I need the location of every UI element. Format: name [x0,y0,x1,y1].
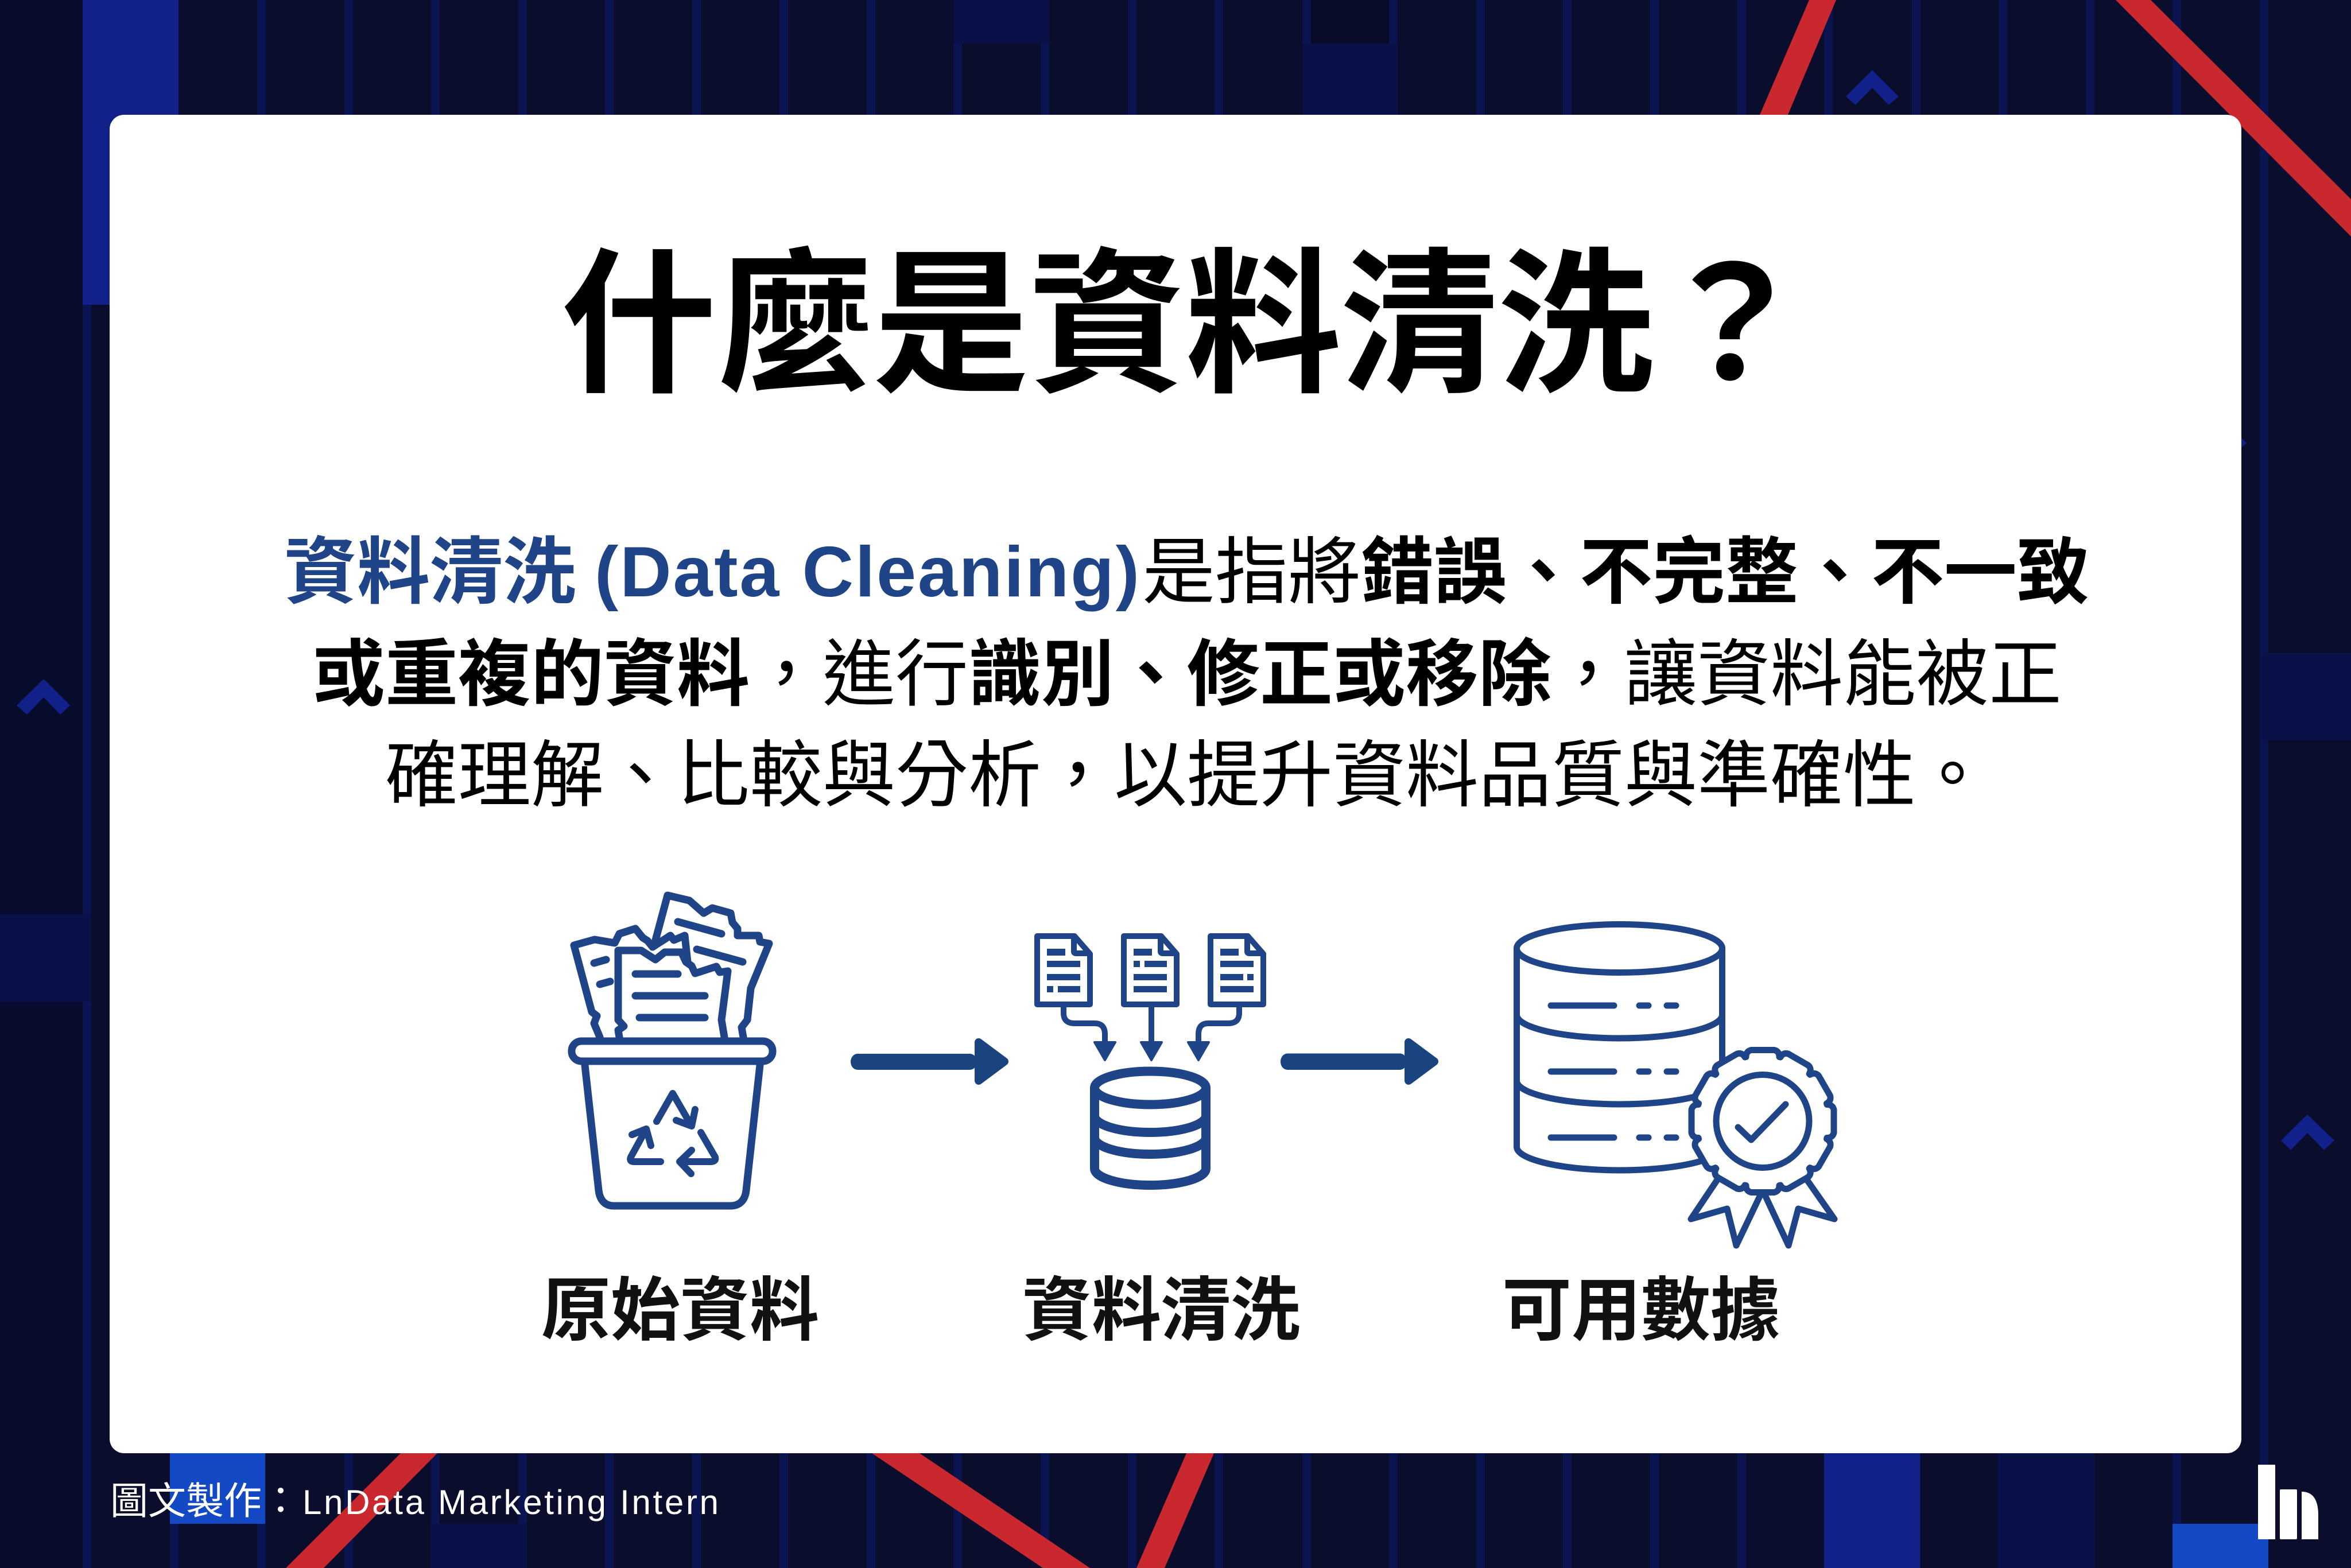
definition line 3: 確理解、比較與分析，以提升資料品質與準確性。 [385,716,1989,822]
document 3 [1211,936,1263,1004]
title: 什麼是資料清洗？ [561,199,1810,425]
label: usable data: 可用數據 [1502,1254,1780,1354]
bin lid [572,1041,773,1061]
definition line 1 [284,513,2090,619]
left paper [574,929,653,1037]
definition line 1: 是指將錯誤、不完整、不一致 [1142,513,2090,619]
bin body [585,1065,760,1206]
footer credit [110,1470,719,1526]
back paper [653,895,769,1037]
icon: three documents flowing into database [1037,936,1263,1185]
footer credit: LnData Marketing Intern [302,1483,719,1522]
arrow: cleaning to usable data [1281,1042,1434,1081]
icon: recycling bin with raw documents [572,895,773,1206]
badge ribbons [1691,1181,1834,1245]
definition line 1: 資料清洗 [284,513,576,619]
front paper [618,950,728,1037]
label: raw data: 原始資料 [541,1254,819,1354]
large database [1516,924,1722,1170]
footer credit: 圖文製作： [110,1470,300,1526]
icon: certified database [1516,924,1834,1245]
document 1 [1037,936,1090,1004]
definition line 1: (Data Cleaning) [595,533,1139,612]
definition text block [284,513,2090,822]
definition line 2: 或重複的資料，進行識別、修正或移除，讓資料能被正 [312,615,2062,721]
connector arrows [1064,1007,1239,1060]
badge seal [1692,1050,1834,1193]
decorative chevrons [17,70,2334,1150]
logo [2258,1465,2318,1539]
recycle symbol [630,1093,715,1174]
label: data cleaning: 資料清洗 [1022,1254,1300,1354]
small database [1095,1071,1206,1185]
arrow: raw data to cleaning [851,1042,1004,1081]
panel: white card [110,115,2241,1453]
document 2 [1124,936,1177,1004]
